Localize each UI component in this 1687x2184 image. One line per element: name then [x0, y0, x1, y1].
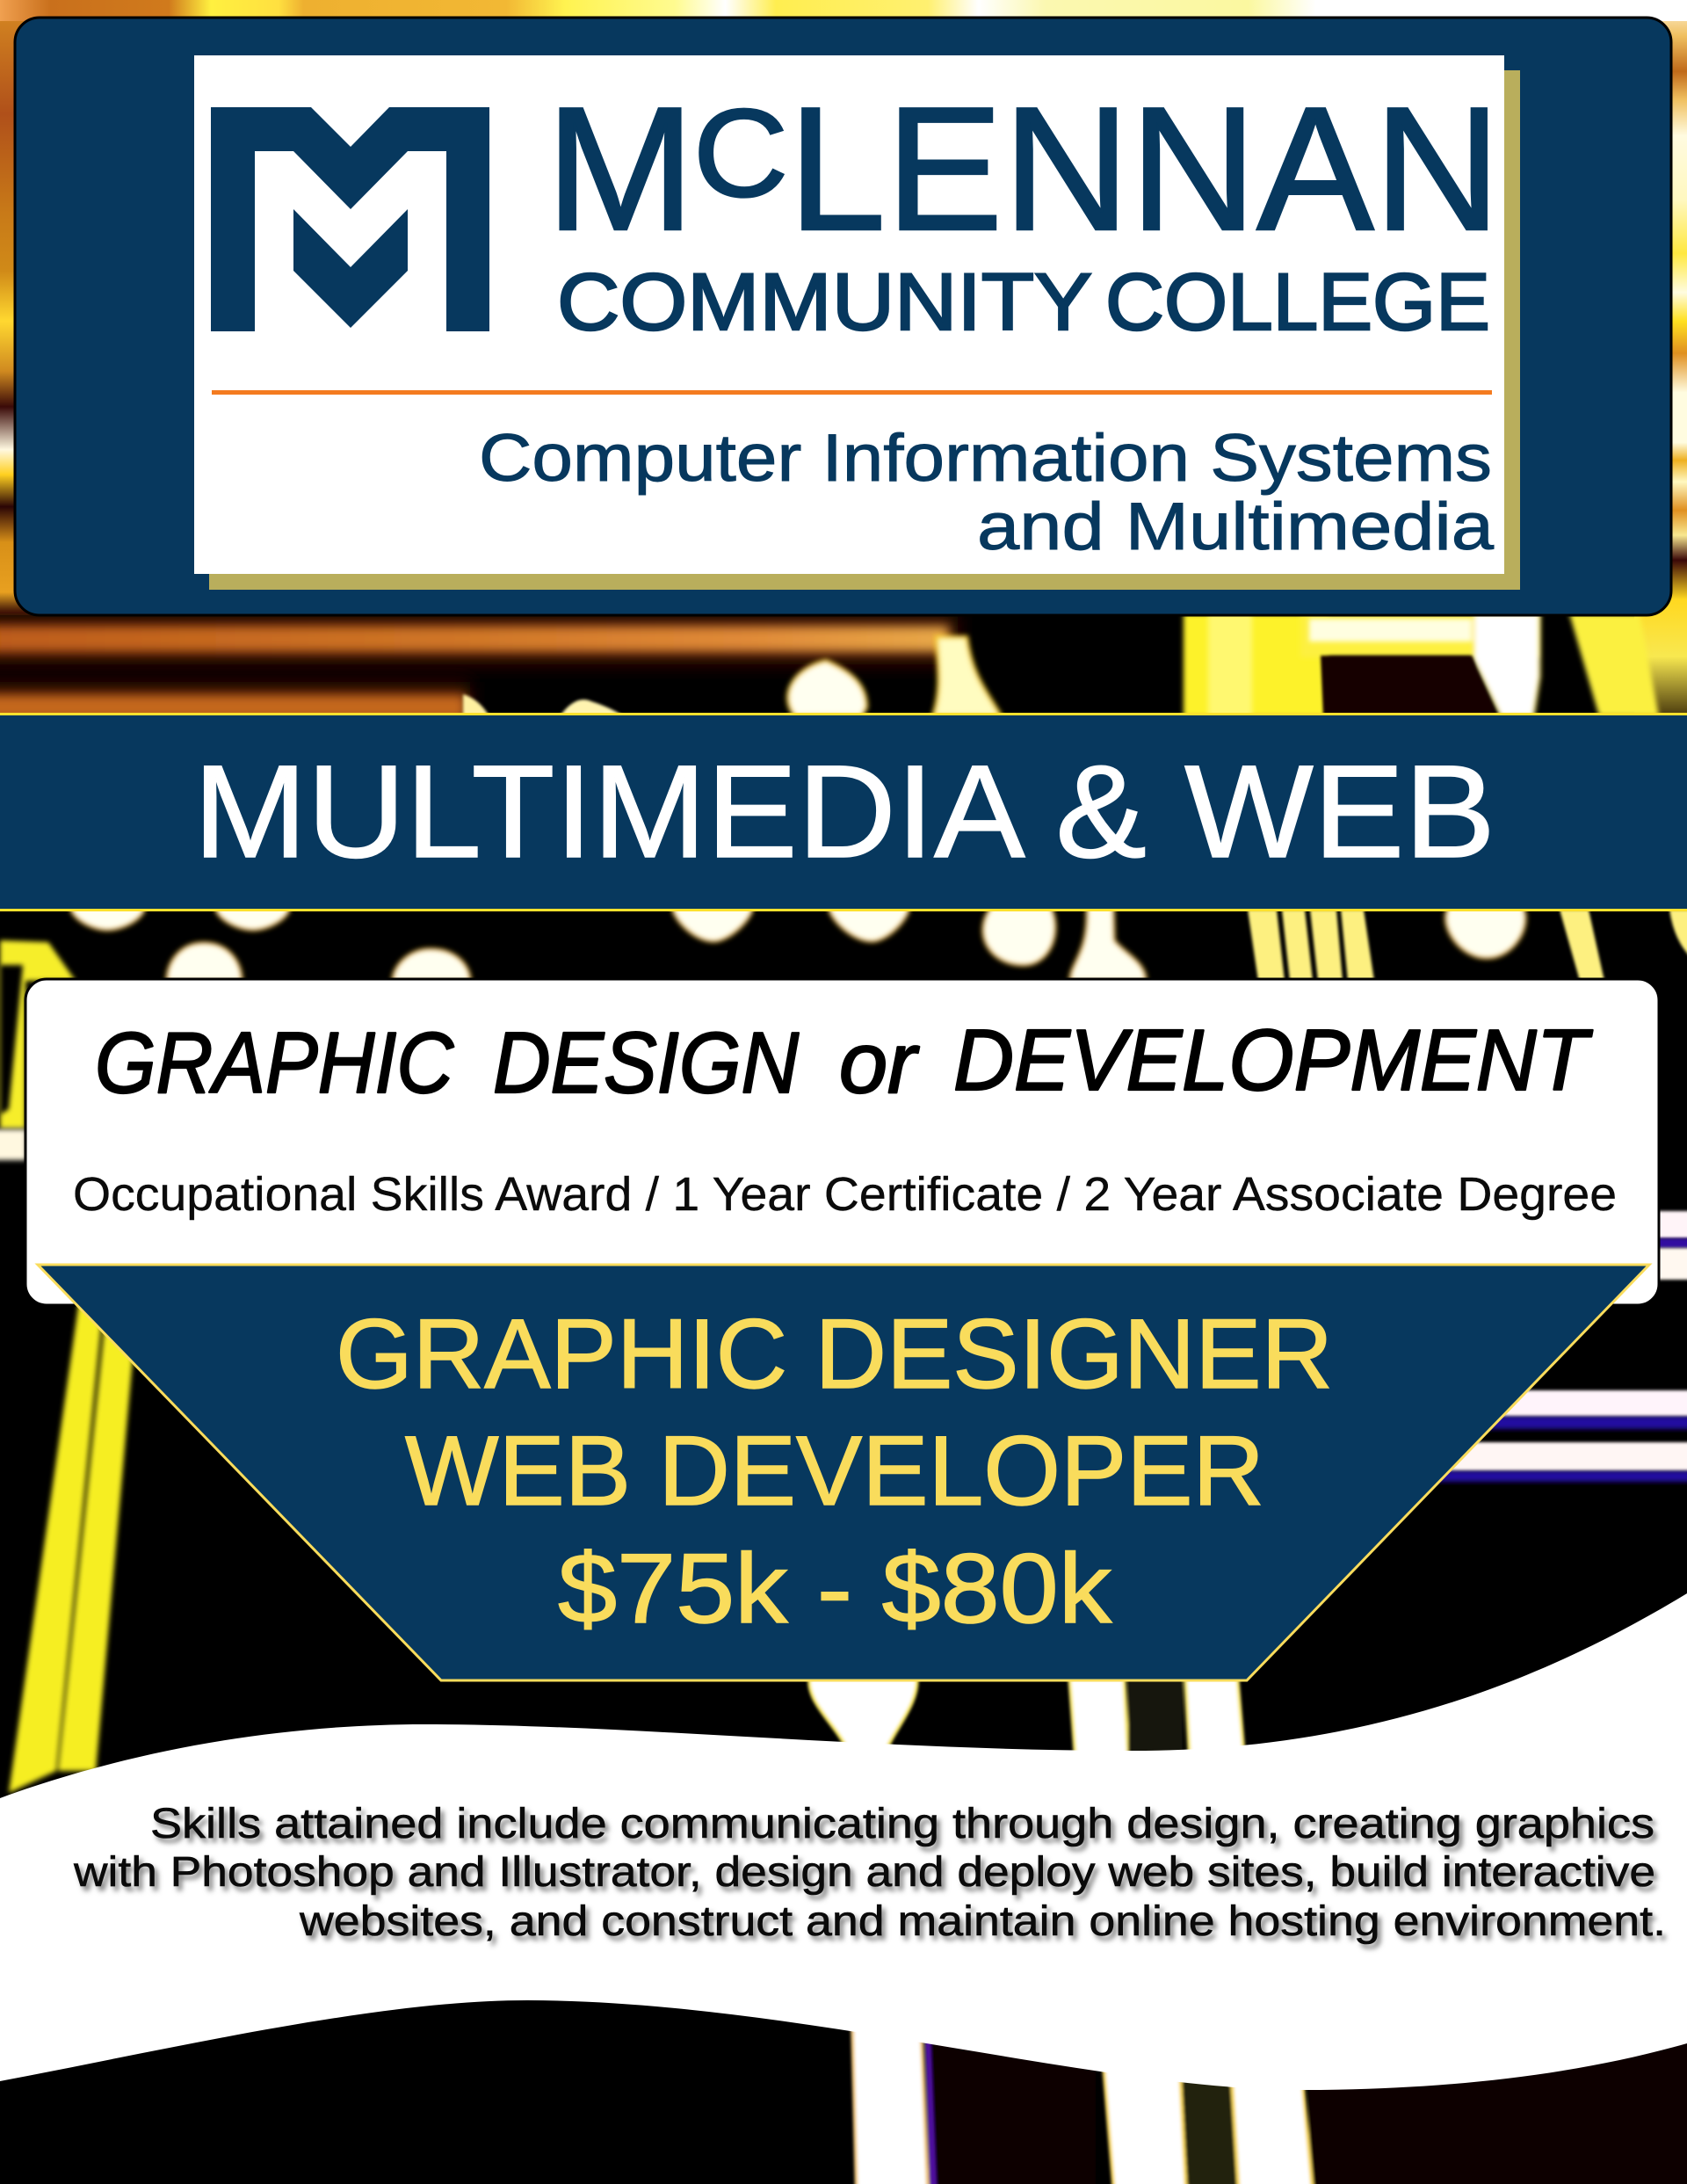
job titles and salary [336, 1299, 1333, 1643]
department name [479, 421, 1495, 564]
heading: Graphic Design or Development: DESIGN [493, 1014, 799, 1111]
wordmark: Community College: COLLEGE [1105, 258, 1490, 347]
text block: skills attained: with Photoshop and Illustrator, design and deploy web sites, build interactive [73, 1849, 1655, 1896]
heading: Graphic Design or Development: or [839, 1014, 919, 1111]
job titles and salary: $75k - $80k [558, 1534, 1112, 1643]
heading: Graphic Design or Development [95, 1012, 1593, 1111]
wordmark: Community College: COMMUNITY [557, 258, 1092, 347]
icon: McLennan M logo mark [211, 107, 489, 331]
right white and blue traces [1406, 1211, 1687, 1482]
text block: skills attained: Skills attained include communicating through design, creating graphics [150, 1801, 1654, 1847]
panel: careers and salary trapezoid [38, 1265, 1649, 1680]
text block: skills attained [73, 1801, 1666, 1945]
heading: Graphic Design or Development: GRAPHIC [95, 1014, 454, 1111]
yellow slanted traces lower left [9, 1301, 138, 1793]
logo card shadow [209, 70, 1520, 590]
job titles and salary: WEB DEVELOPER [405, 1416, 1264, 1526]
logo card [194, 55, 1504, 574]
title: Multimedia & Web: MULTIMEDIA & WEB [193, 737, 1495, 885]
bottom traces [852, 2021, 1687, 2184]
wordmark: McLennan: C [693, 83, 788, 223]
panel: header [15, 18, 1671, 615]
left edge traces [0, 940, 76, 1160]
heading: Graphic Design or Development: DEVELOPMENT [953, 1012, 1593, 1108]
orange divider [212, 390, 1492, 395]
pad and traces under trapezoid [809, 1674, 1244, 1758]
credentials line: Occupational Skills Award / 1 Year Certificate / 2 Year Associate Degree [73, 1168, 1617, 1221]
wordmark: Community College [557, 258, 1490, 347]
white wave band [0, 1593, 1687, 2090]
department name: Computer Information Systems [479, 421, 1492, 496]
text block: skills attained: websites, and construct and maintain online hosting environment. [299, 1898, 1666, 1945]
traces between header panel and title bar [0, 613, 1659, 726]
title bar [0, 713, 1687, 911]
panel: programme options [25, 979, 1659, 1305]
job titles and salary: GRAPHIC DESIGNER [336, 1299, 1333, 1409]
wordmark: McLennan: M [546, 71, 695, 267]
wordmark: McLennan: LENNAN [788, 71, 1501, 267]
traces and solder pads below title bar [70, 905, 1525, 981]
department name: and Multimedia [977, 490, 1495, 564]
